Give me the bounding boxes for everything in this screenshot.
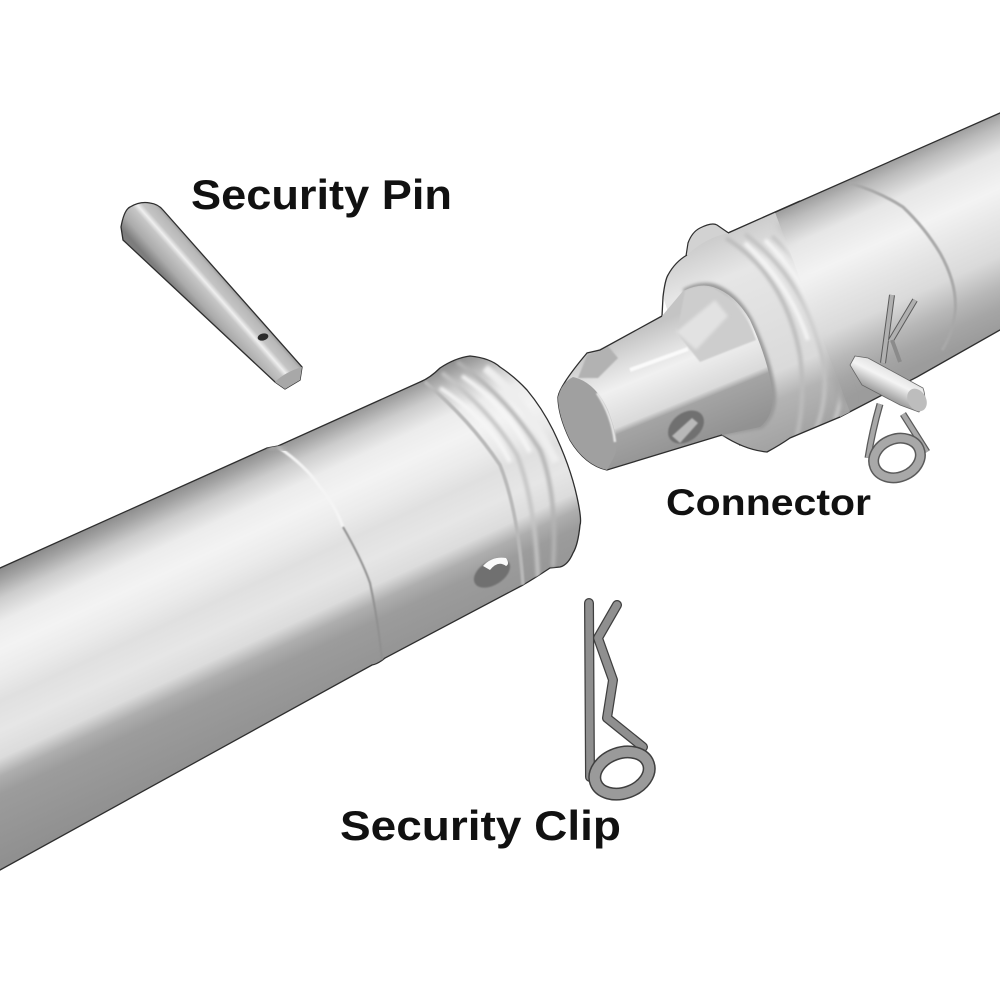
security clip	[589, 603, 655, 801]
face rim	[597, 393, 615, 442]
right tube with connector	[558, 110, 1000, 470]
connector hole	[662, 404, 710, 450]
clip coil	[589, 745, 655, 801]
locating lug	[686, 224, 730, 258]
tube seam	[268, 362, 556, 660]
tube body and collar	[0, 356, 581, 873]
label: connector: Connector	[666, 482, 871, 523]
head face	[558, 377, 616, 470]
installed security clip and pin	[850, 295, 931, 485]
flange to tube blend	[782, 222, 846, 402]
clip loop wires	[868, 404, 927, 458]
pin cylinder	[850, 356, 925, 412]
infographic: truss connector assembly diagram	[0, 112, 1000, 871]
connector head	[558, 286, 772, 470]
head stripe	[630, 349, 688, 370]
clip coil	[868, 431, 926, 485]
pin hole	[257, 332, 269, 342]
flange collar	[663, 212, 850, 452]
flange outline bottom	[722, 417, 840, 452]
flange outline top	[662, 255, 687, 316]
head facets	[677, 286, 756, 362]
pin hole	[469, 552, 515, 594]
facet highlight	[676, 300, 728, 350]
head outline	[558, 316, 722, 470]
clip wire behind	[892, 340, 900, 362]
connector base ring	[683, 283, 776, 436]
clip tines	[883, 295, 915, 363]
label: security pin: Security Pin	[191, 171, 452, 218]
left tube	[0, 356, 581, 873]
label: security clip: Security Clip	[340, 802, 621, 849]
tube seam	[850, 183, 955, 350]
clip wires	[589, 603, 643, 777]
tube body	[728, 110, 1000, 445]
pin end	[903, 385, 931, 415]
security pin	[121, 202, 302, 389]
head tip facet	[578, 346, 618, 378]
pin tip facet	[275, 367, 302, 389]
tube top outline	[728, 201, 800, 233]
